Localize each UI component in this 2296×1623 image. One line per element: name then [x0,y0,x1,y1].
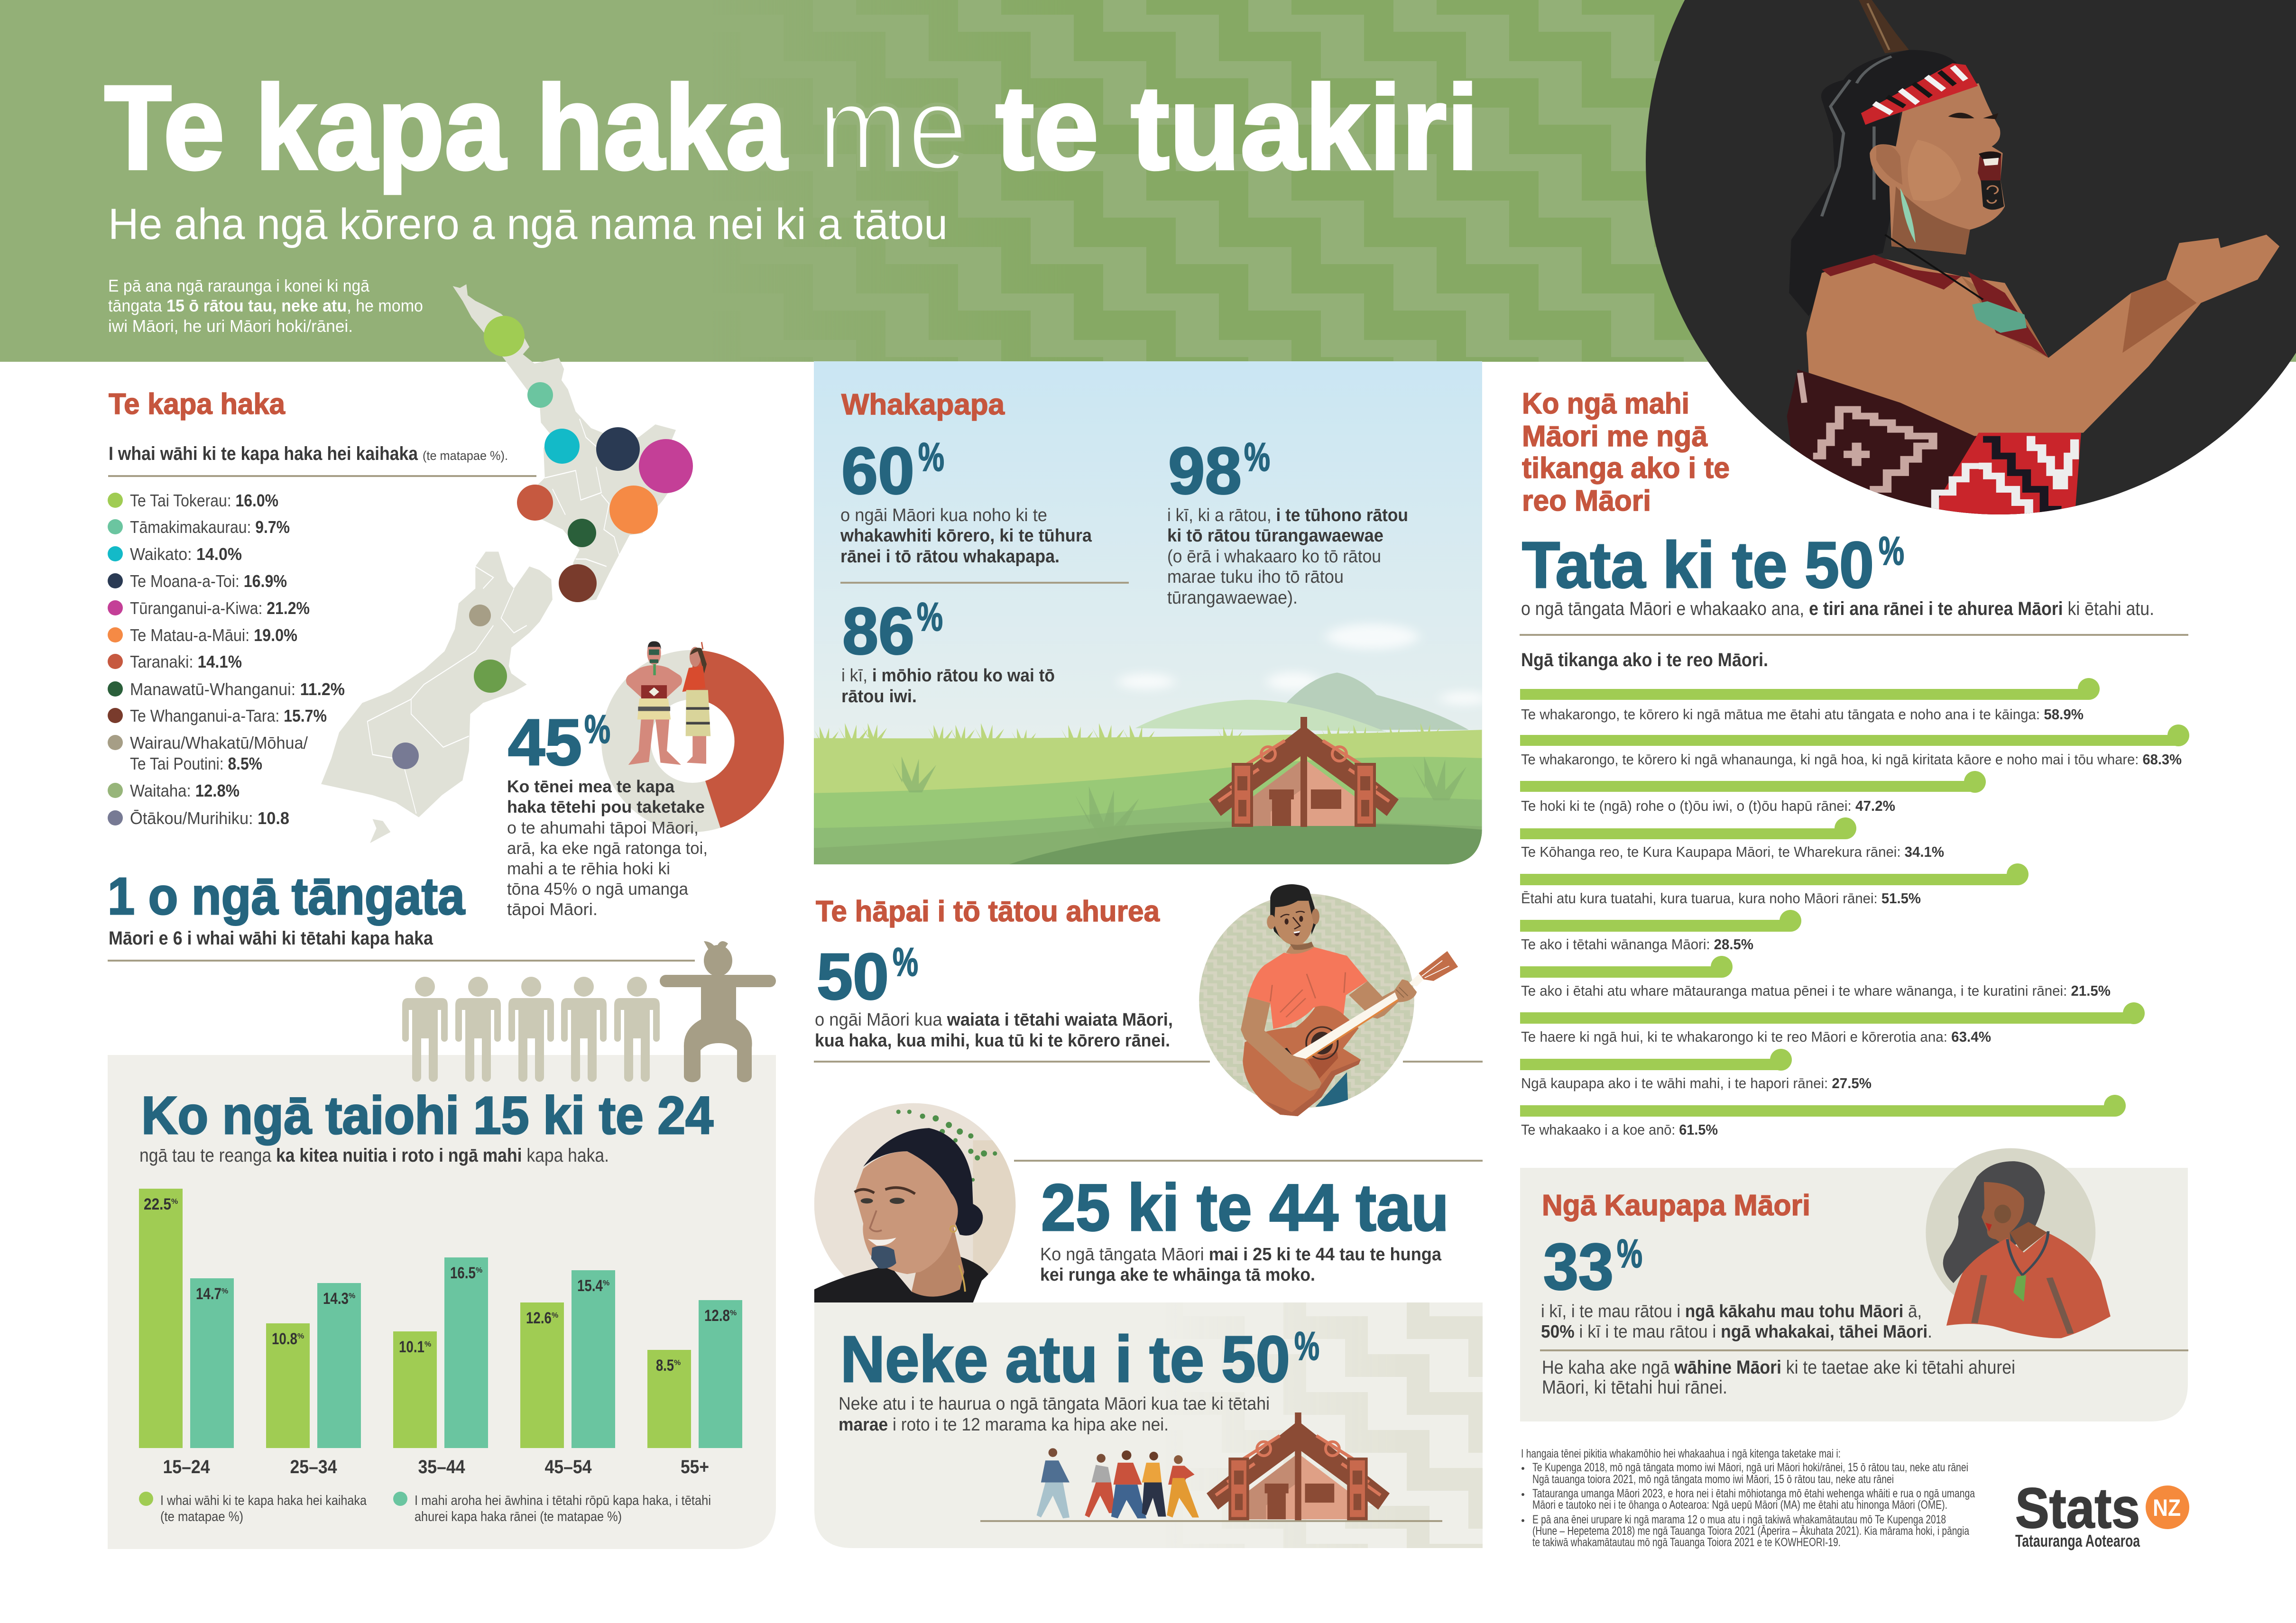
statistic 98%: marae tuku iho tō rātou [1167,567,1344,587]
icon: man playing guitar [1199,884,1458,1116]
bar chart: 25–34 [290,1457,337,1477]
statistic 98%: tūrangawaewae). [1167,588,1298,608]
icon: man and woman in traditional dress [626,642,710,765]
icon: row of people [402,977,660,1082]
bar chart: % [297,1332,304,1340]
statistic: 1 in 6 people: 1 o ngā tāngata [108,867,465,926]
text: youth summary: ngā tau te reanga ka kitea nuitia i roto i ngā mahi kapa haka. [139,1145,609,1166]
statistic 50%: 50 [817,940,889,1013]
bars: ways of learning te reo: Te Kōhanga reo, te Kura Kaupapa Māori, te Wharekura rānei: 34.1% [1521,844,1944,860]
statistic 86%: 86 [842,594,914,668]
icon: people walking to marae [980,1412,1442,1522]
text: moko: Ko ngā tāngata Māori mai i 25 ki te 44 tau te hunga [1040,1245,1442,1265]
statistic 60% [840,433,1129,584]
intro text: E pā ana ngā raraunga i konei ki ngā [108,276,370,295]
panel: Whakapapa landscape [814,361,1488,866]
donut chart 45% [626,650,784,828]
bar chart: 15–24 [163,1457,210,1477]
bar chart: 55+ [681,1457,709,1477]
logo: Stats NZ: Tatauranga Aotearoa [2015,1531,2140,1550]
logo: Stats NZ: Stats [2015,1476,2140,1540]
footnotes: Ngā tauanga toiora 2021, mō ngā tāngata momo iwi Māori, 15 ō rātou tau, neke atu rānei [1532,1473,1894,1486]
bar chart: % [730,1309,737,1317]
heading: Te hāpai i tō tātou ahurea: Te hāpai i tō tātou ahurea [816,895,1160,928]
statistic 98%: 98 [1168,433,1242,508]
footnotes: (Hune – Hepetema 2018) me ngā Tauanga Toiora 2021 (Āperira – Ākuhata 2021). Kia mārama hoki, i pāngia [1532,1524,1969,1538]
legend heading: (te matapae %). [423,449,508,463]
title: Te kapa haka [104,61,788,194]
statistic 60%: % [918,435,944,479]
text: 45% explanation: tōna 45% o ngā umanga [507,879,689,899]
heading: Ko ngā mahi Māori: Māori me ngā [1522,420,1708,453]
bar chart: 10.8 [272,1330,297,1348]
bar chart: 22.5 [144,1195,171,1213]
text: marae: Neke atu i te haurua o ngā tāngata Māori kua tae ki tētahi [839,1394,1270,1414]
footnotes: E pā ana ēnei urupare ki ngā marama 12 o mua atu i ngā takiwā whakamātautau mō Te Kupenga 2018 [1532,1513,1946,1526]
bar chart: 14.3 [323,1290,349,1308]
statistic 50% [815,940,1173,1051]
bar chart: % [349,1292,355,1300]
statistic: Tata ki te 50%: Tata ki te 50 [1522,529,1874,602]
legend heading: I whai wāhi ki te kapa haka hei kaihaka [109,443,418,464]
bars: ways of learning te reo: Te ako i tētahi wānanga Māori: 28.5% [1521,936,1753,953]
text: 45% explanation: arā, ka eke ngā ratonga toi, [507,838,708,858]
text: 45% explanation: Ko tēnei mea te kapa [507,777,675,796]
region legend: Te Matau-a-Māui: 19.0% [130,625,297,645]
bar chart: 16.5 [450,1264,476,1282]
text: moko [1040,1245,1442,1285]
statistic 50%: kua haka, kua mihi, kua tū ki te kōrero rānei. [815,1031,1170,1051]
photo: kapa haka performer [1613,0,2296,522]
bar chart: % [476,1266,482,1275]
chart legend [139,1492,711,1524]
statistic 33%: % [1617,1231,1642,1276]
statistic 60%: whakawhiti kōrero, ki te tūhura [840,526,1092,546]
chart legend: I whai wāhi ki te kapa haka hei kaihaka [160,1493,367,1508]
text: wāhine Māori: Māori, ki tētahi hui rānei. [1542,1377,1727,1398]
text: marae [839,1394,1270,1435]
bar chart: % [171,1198,178,1206]
statistic 98%: % [1244,435,1270,479]
statistic 98% [1167,433,1408,608]
region legend: Wairau/Whakatū/Mōhua/ [130,733,308,752]
bars: ways of learning te reo: Te ako i ētahi atu whare mātauranga matua pēnei i te whare wānanga, i te kuratini rānei: 21.5% [1521,982,2111,999]
statistic: Tata ki te 50%: % [1879,529,1904,573]
text: 45% explanation: o te ahumahi tāpoi Māori, [507,818,699,837]
text: moko: kei runga ake te whāinga tā moko. [1040,1265,1315,1285]
intro text [108,276,423,336]
intro text: tāngata 15 ō rātou tau, neke atu, he momo [108,296,423,315]
bar chart: 45–54 [544,1457,592,1477]
chart legend: I mahi aroha hei āwhina i tētahi rōpū kapa haka, i tētahi [415,1493,711,1508]
region legend: Te Tai Poutini: 8.5% [130,754,262,773]
heading: Whakapapa: Whakapapa [841,388,1005,421]
text: 45% explanation [507,777,708,919]
statistic 33%: 50% i kī i te mau rātou i ngā whakakai, tāhei Māori. [1541,1322,1932,1342]
statistic 86%: rātou iwi. [841,687,917,706]
statistic 86%: i kī, i mōhio rātou ko wai tō [841,666,1055,686]
heading: Ko ngā mahi Māori [1522,387,1730,517]
map bubbles [392,316,693,769]
heading: Ko ngā mahi Māori: tikanga ako i te [1522,452,1730,485]
text: 45% explanation: mahi a te rēhia hoki ki [507,859,670,878]
bar chart: % [424,1340,431,1348]
text: wāhine Māori: He kaha ake ngā wāhine Māori ki te taetae ake ki tētahi ahurei [1542,1357,2015,1378]
footnotes: Tatauranga umanga Māori 2023, e hora nei i ētahi mōhiotanga mō ētahi wehenga whāiti e rua o ngā umanga [1532,1487,1975,1500]
logo: Stats NZ: NZ [2153,1495,2181,1521]
bar chart: 12.8 [704,1307,730,1325]
photo: woman with moko kauae [814,1102,1018,1306]
text: wāhine Māori [1542,1357,2015,1398]
heading: Ngā Kaupapa Māori: Ngā Kaupapa Māori [1542,1189,1810,1222]
statistic 98%: i kī, ki a rātou, i te tūhono rātou [1167,505,1408,525]
region legend: Tūranganui-a-Kiwa: 21.2% [130,598,310,618]
panel: marae visits [814,1302,1483,1548]
statistic 60%: 60 [841,433,914,508]
legend heading [108,443,536,477]
footnotes: Māori e tautoko nei i te ōhanga o Aotearoa: Ngā uepū Māori (MA) me ētahi atu hinonga Māori (OME). [1532,1498,1947,1512]
bars: ways of learning te reo: Te hoki ki te (ngā) rohe o (t)ōu iwi, o (t)ōu hapū rānei: 47.2% [1521,798,1895,814]
panel heading: Te kapa haka: Te kapa haka [109,388,285,421]
title [104,61,1479,194]
header banner [0,0,2296,362]
region legend [108,491,345,828]
icon: haka figure [660,941,776,1082]
bar chart: % [552,1311,558,1320]
panel: youth bar chart [108,1055,776,1549]
subtitle: He aha ngā kōrero a ngā nama nei ki a tātou [108,200,948,248]
title: te tuakiri [996,61,1479,194]
statistic 98%: (o ērā i whakaaro ko tō rātou [1167,547,1381,567]
bar chart: 15.4 [577,1277,603,1295]
statistic 45%: 45 [508,706,582,779]
statistic 33%: i kī, i te mau rātou i ngā kākahu mau tohu Māori ā, [1541,1302,1922,1321]
statistic 50%: % [893,940,918,984]
bars: ways of learning te reo: Ngā kaupapa ako i te wāhi mahi, i te hapori rānei: 27.5% [1521,1075,1872,1091]
footnotes: I hangaia tēnei pikitia whakamōhio hei whakaahua i ngā kitenga taketake mai i: [1521,1447,1841,1460]
statistic: Neke atu i te 50%: Neke atu i te 50 [840,1323,1290,1396]
text: marae: marae i roto i te 12 marama ka hipa ake nei. [839,1415,1169,1435]
region legend: Waikato: 14.0% [130,544,242,564]
chart legend: ahurei kapa haka rānei (te matapae %) [415,1509,622,1524]
region legend: Taranaki: 14.1% [130,652,242,671]
bar chart: 35–44 [418,1457,465,1477]
heading: Ngā tikanga ako: Ngā tikanga ako i te reo Māori. [1521,650,1768,670]
statistic 86%: % [917,595,943,639]
bars: ways of learning te reo: Te whakarongo, te kōrero ki ngā mātua me ētahi atu tāngata e noho ana i te kāinga: 58.9% [1521,706,2084,723]
intro text: iwi Māori, he uri Māori hoki/rānei. [108,316,353,336]
text: Tata ki te 50%: o ngā tāngata Māori e whakaako ana, e tiri ana rānei i te ahurea Māori ki ētahi atu. [1521,598,2154,619]
statistic 60%: rānei i tō rātou whakapapa. [840,547,1060,567]
statistic: 1 in 6 people: Māori e 6 i whai wāhi ki tētahi kapa haka [109,928,433,949]
region legend: Te Whanganui-a-Tara: 15.7% [130,706,327,725]
bars: ways of learning te reo: Te whakarongo, te kōrero ki ngā whanaunga, ki ngā hoa, ki ngā kiritata kāore e noho mai i tōu whare: 68.3% [1521,751,2182,768]
divider and heading: 25 ki te 44 tau: 25 ki te 44 tau [1041,1170,1449,1245]
statistic 33%: 33 [1543,1230,1614,1303]
text: 45% explanation: tāpoi Māori. [507,899,598,919]
bars: ways of learning te reo: Ētahi atu kura tuatahi, kura tuarua, kura noho Māori rānei: 51.5% [1521,890,1921,907]
icon: marae [1209,717,1399,827]
bars: ways of learning te reo: Te whakaako i a koe anō: 61.5% [1521,1121,1718,1138]
bar chart: 14.7 [196,1285,221,1303]
title: me [818,61,968,194]
panel: Ngā Kaupapa Māori [1520,1168,2188,1421]
bars: ways of learning te reo [1520,678,2189,1138]
bar chart: 10.1 [399,1338,424,1356]
statistic 86% [841,594,1055,706]
text: 45% explanation: haka tētehi pou taketake [507,797,705,816]
region legend: Tāmakimakaurau: 9.7% [130,517,290,537]
statistic 98%: ki tō rātou tūrangawaewae [1167,526,1383,546]
bar chart: 12.6 [526,1309,552,1327]
footnotes [1521,1447,1975,1549]
region legend: Waitaha: 12.8% [130,781,240,800]
map of New Zealand [321,284,693,843]
footnotes: te takiwā whakamātautau mō ngā Tauanga Toiora 2021 e te KOWHEORI-19. [1532,1536,1841,1549]
bar chart: % [674,1359,681,1367]
bar chart: % [603,1279,609,1287]
region legend: Ōtākou/Murihiku: 10.8 [130,808,289,828]
region legend: Manawatū-Whanganui: 11.2% [130,679,345,699]
bars: ways of learning te reo: Te haere ki ngā hui, ki te whakarongo ki te reo Māori e kōrerotia ana: 63.4% [1521,1028,1991,1045]
statistic 45%: % [584,707,610,752]
heading: Ko ngā mahi Māori: reo Māori [1522,485,1651,517]
region legend: Te Moana-a-Toi: 16.9% [130,571,287,591]
statistic 50%: o ngāi Māori kua waiata i tētahi waiata Māori, [815,1010,1173,1030]
statistic 33% [1540,1230,2188,1351]
bar chart [139,1189,742,1477]
bar chart: 8.5 [656,1357,674,1375]
heading: youth: Ko ngā taiohi 15 ki te 24 [141,1086,713,1145]
statistic 60%: o ngāi Māori kua noho ki te [840,505,1047,525]
heading: Ko ngā mahi Māori: Ko ngā mahi [1522,387,1689,420]
bar chart: % [221,1287,228,1295]
footnotes: Te Kupenga 2018, mō ngā tāngata momo iwi Māori, ngā uri Māori hoki/rānei, 15 ō rātou tau, neke atu rānei [1532,1461,1968,1474]
chart legend: (te matapae %) [160,1509,243,1524]
statistic: 1 in 6 people [108,867,695,962]
region legend: Te Tai Tokerau: 16.0% [130,491,278,510]
statistic: Neke atu i te 50%: % [1294,1324,1319,1368]
logo: Stats NZ [2015,1476,2189,1550]
icon: woman with pounamu [1926,1148,2111,1338]
